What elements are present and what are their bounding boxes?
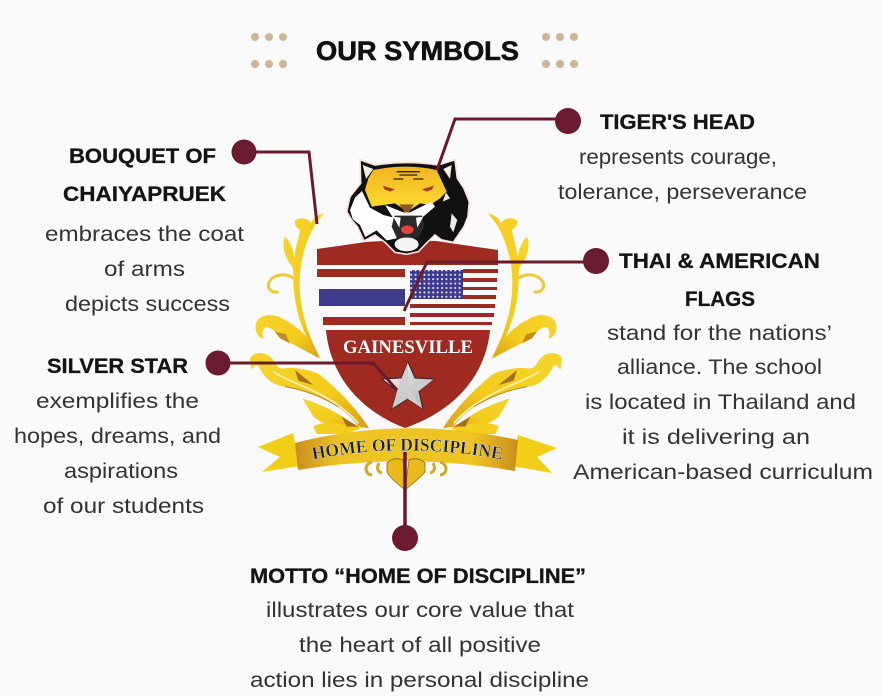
decorative dots right of title [542,33,578,68]
text: thai and american flags: it is delivering an [622,426,810,449]
text: thai and american flags: stand for the nations’ [607,322,832,345]
text: thai and american flags: THAI & AMERICAN [619,250,820,273]
decorative dots left of title [251,33,287,68]
text: bouquet of chaiyapruek: BOUQUET OF [69,145,216,168]
text: bouquet of chaiyapruek: of arms [104,258,185,281]
connector: tiger's head [437,108,581,170]
text: bouquet of chaiyapruek: embraces the coat [45,223,244,246]
banner motto text: HOME OF DISCIPLINE [311,438,502,460]
text: silver star: hopes, dreams, and [14,425,221,448]
text: silver star: of our students [43,495,204,518]
text: bouquet of chaiyapruek: depicts success [65,293,230,316]
GAINESVILLE label: GAINESVILLE [343,337,473,358]
silver star [382,362,434,409]
text: bouquet of chaiyapruek: CHAIYAPRUEK [63,183,226,206]
text: thai and american flags: alliance. The school [617,356,822,379]
shield [317,240,498,428]
title: OUR SYMBOLS [316,36,519,66]
connector: flags [404,248,609,311]
connector: bouquet [232,140,317,224]
text: silver star: exemplifies the [36,390,199,413]
text: thai and american flags [573,250,873,484]
right gold laurel [443,213,562,434]
text: silver star: aspirations [64,460,178,483]
text: motto: action lies in personal discipline [250,669,589,692]
text: thai and american flags: American-based curriculum [573,461,873,484]
left gold laurel [250,213,369,434]
text: tiger's head: tolerance, perseverance [558,181,807,204]
text: thai and american flags: FLAGS [685,288,755,311]
text: motto: illustrates our core value that [266,599,574,622]
text: bouquet of chaiyapruek [45,145,244,316]
text: motto [250,565,589,692]
text: silver star: SILVER STAR [47,355,188,378]
connector: motto [392,452,418,551]
tiger head [347,160,469,254]
connector: silver star [206,350,397,390]
text: tiger's head: TIGER'S HEAD [600,111,755,134]
text: thai and american flags: is located in Thailand and [585,391,856,414]
text: tiger's head [558,111,807,204]
text: silver star [14,355,221,518]
banner [258,428,557,490]
text: tiger's head: represents courage, [579,146,777,169]
school crest emblem [250,158,562,490]
text: motto: MOTTO “HOME OF DISCIPLINE” [250,565,586,588]
text: motto: the heart of all positive [299,634,541,657]
